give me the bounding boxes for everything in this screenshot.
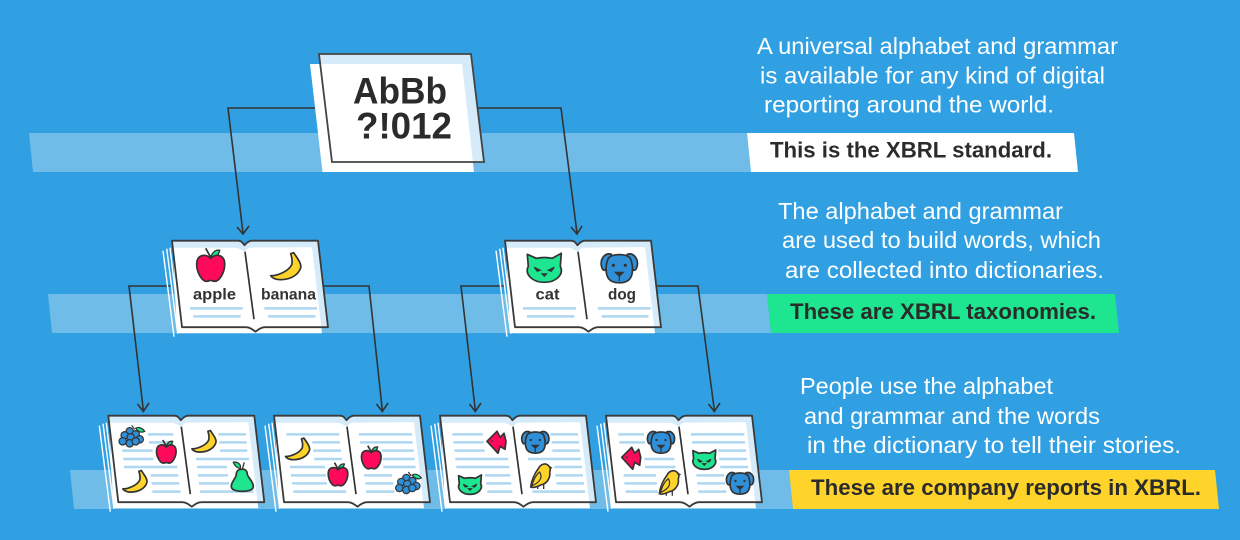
panel: report book 2 bbox=[265, 416, 430, 512]
icon: dog bbox=[522, 432, 549, 453]
label: banana: banana bbox=[261, 286, 316, 303]
band: company reports row bbox=[70, 470, 793, 509]
card text: symbols and digits: ?!012 bbox=[356, 106, 452, 147]
band: XBRL standard row bbox=[29, 133, 751, 172]
icon: apple bbox=[156, 440, 176, 463]
label: dog: dog bbox=[608, 286, 636, 303]
callout: XBRL standard bbox=[747, 133, 1078, 172]
text block: reports description: in the dictionary to tell their stories. bbox=[807, 432, 1181, 458]
callout: company reports: These are company reports in XBRL. bbox=[811, 475, 1201, 500]
icon: cat bbox=[459, 475, 481, 494]
icon: apple bbox=[328, 463, 348, 486]
icon: fish bbox=[487, 431, 506, 453]
icon: bird bbox=[659, 471, 681, 496]
panel: report book 1 bbox=[99, 416, 264, 512]
icon: banana bbox=[123, 470, 147, 492]
icon: dog bbox=[726, 473, 754, 494]
icon: bird bbox=[531, 464, 553, 489]
icon: banana bbox=[271, 253, 301, 280]
callout: XBRL taxonomies: These are XBRL taxonomies. bbox=[790, 299, 1096, 324]
text block: taxonomies description bbox=[778, 198, 1104, 283]
label: apple: apple bbox=[193, 286, 236, 303]
callout: XBRL standard: This is the XBRL standard. bbox=[770, 138, 1052, 163]
icon: cat bbox=[527, 253, 561, 282]
icon: apple bbox=[362, 446, 381, 469]
text block: taxonomies description: are used to build words, which bbox=[782, 227, 1101, 253]
text block: standard description: reporting around the world. bbox=[764, 92, 1054, 118]
icon: grapes bbox=[396, 472, 421, 494]
text block: taxonomies description: The alphabet and grammar bbox=[778, 198, 1063, 224]
connector arrows: taxonomies to reports bbox=[129, 286, 720, 412]
text block: taxonomies description: are collected into dictionaries. bbox=[785, 257, 1104, 283]
text block: standard description: A universal alphabet and grammar bbox=[757, 33, 1118, 59]
label: cat: cat bbox=[536, 286, 560, 303]
card text: letters: AbBb bbox=[353, 70, 447, 112]
callout: XBRL taxonomies bbox=[767, 294, 1119, 333]
band: XBRL taxonomies row bbox=[48, 294, 771, 333]
icon: dog bbox=[601, 254, 637, 283]
panel: animal dictionary book bbox=[496, 241, 661, 337]
text block: reports description: and grammar and the words bbox=[804, 403, 1100, 429]
connector arrows: standard to taxonomies bbox=[228, 108, 582, 234]
callout: company reports bbox=[789, 470, 1219, 509]
icon: grapes bbox=[119, 425, 145, 447]
icon: pear bbox=[231, 462, 253, 491]
text block: standard description: is available for any kind of digital bbox=[760, 62, 1105, 88]
panel: fruit dictionary book bbox=[163, 241, 328, 337]
icon: apple bbox=[197, 248, 225, 281]
text block: reports description: People use the alphabet bbox=[800, 373, 1054, 399]
text block: standard description bbox=[757, 33, 1118, 118]
icon: dog bbox=[647, 432, 675, 453]
text block: reports description bbox=[800, 373, 1181, 458]
panel: report book 3 bbox=[431, 416, 596, 512]
panel: report book 4 bbox=[597, 416, 762, 512]
icon: banana bbox=[286, 438, 310, 460]
icon: cat bbox=[693, 450, 716, 469]
icon: banana bbox=[192, 430, 216, 452]
icon: fish bbox=[622, 447, 641, 469]
panel: AbBb standard card bbox=[310, 54, 484, 172]
